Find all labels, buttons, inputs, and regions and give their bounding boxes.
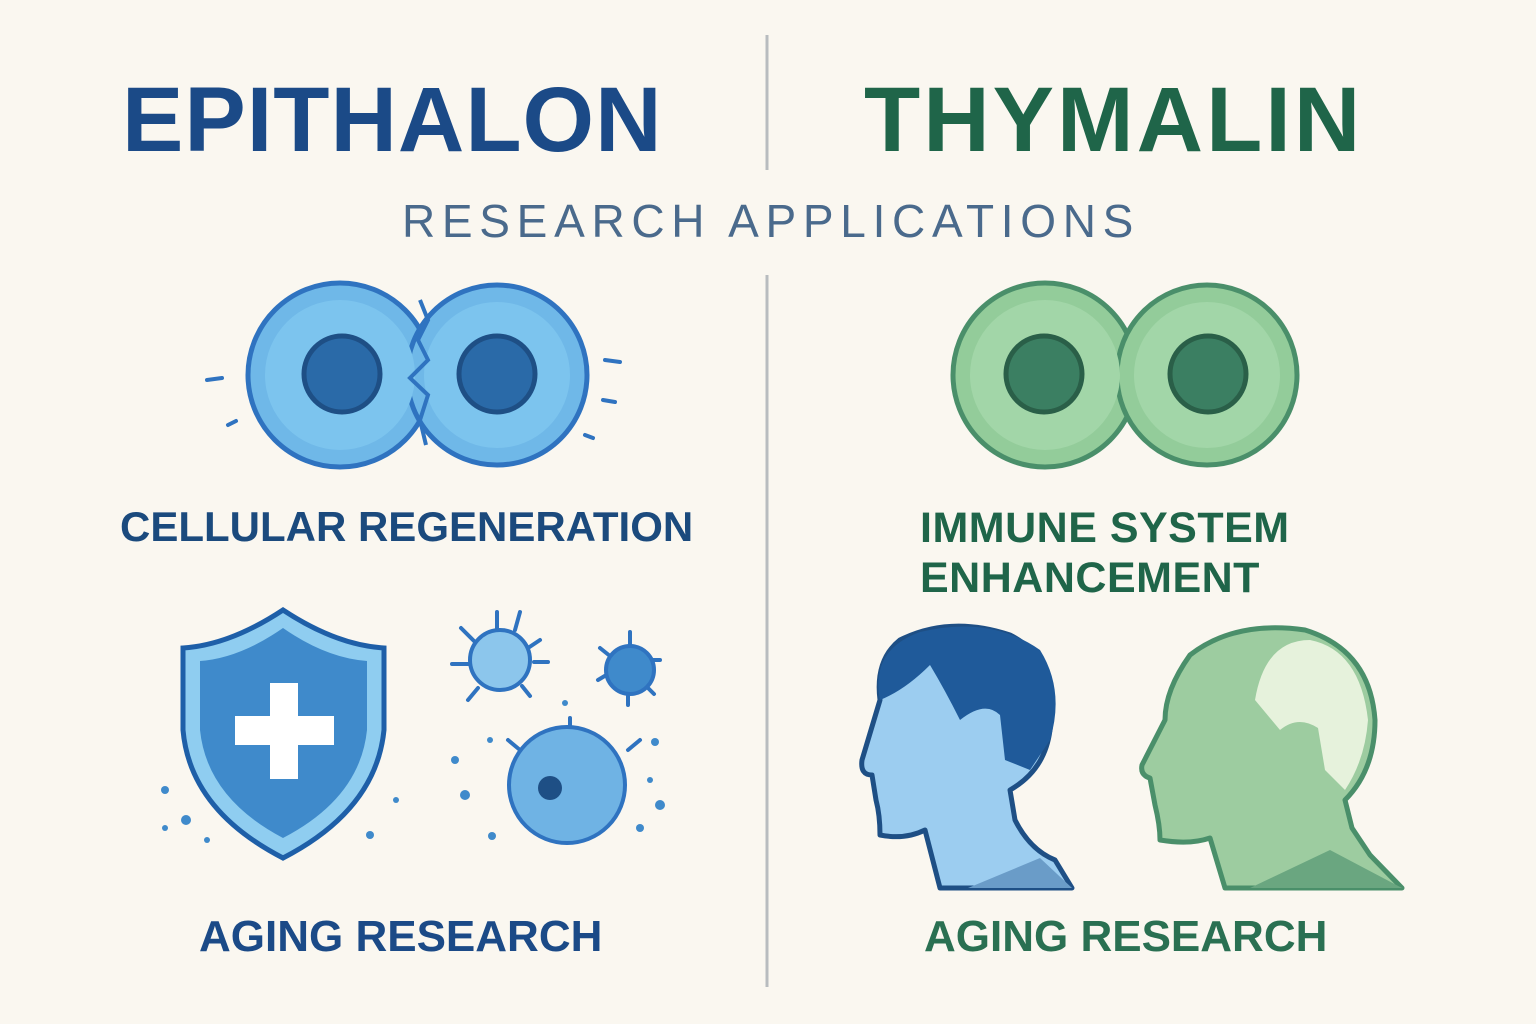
label: aging research left: AGING RESEARCH bbox=[199, 912, 602, 961]
subtitle: RESEARCH APPLICATIONS bbox=[402, 195, 1140, 247]
icon: shield bbox=[161, 607, 399, 861]
title: THYMALIN: THYMALIN bbox=[864, 69, 1363, 171]
label: immune system enhancement: ENHANCEMENT bbox=[920, 554, 1260, 602]
icon: old head bbox=[1139, 625, 1404, 890]
label: cellular regeneration: CELLULAR REGENERATION bbox=[120, 503, 693, 550]
icon: young head bbox=[859, 624, 1074, 890]
label: aging research right: AGING RESEARCH bbox=[924, 912, 1327, 961]
icon: green dividing cells bbox=[950, 280, 1300, 470]
title: EPITHALON: EPITHALON bbox=[122, 69, 663, 171]
label: immune system enhancement bbox=[920, 504, 1290, 602]
icon: blue dividing cells bbox=[205, 280, 622, 470]
icon: viruses bbox=[450, 610, 665, 845]
label: immune system enhancement: IMMUNE SYSTEM bbox=[920, 504, 1290, 552]
